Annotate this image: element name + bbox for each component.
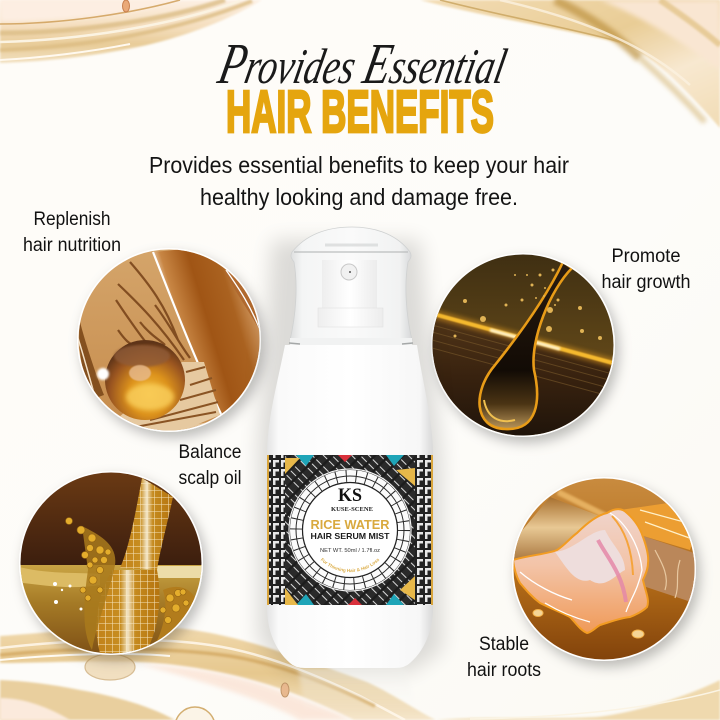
- title: HAIR BENEFITS: HAIR BENEFITS: [226, 79, 494, 145]
- label: Balance scalp oil: [178, 442, 242, 489]
- subtitle: [149, 152, 569, 210]
- wave: top right: [420, 0, 720, 128]
- pump nozzle: [318, 260, 383, 327]
- wave: bottom: [0, 627, 720, 720]
- product label: [267, 455, 433, 605]
- title script: Provides Essential: Provides Essential: [213, 32, 513, 96]
- subtitle: healthy looking and damage free.: [200, 184, 518, 210]
- label: Promote hair growth: [602, 246, 690, 293]
- label text: RICE WATER: [310, 517, 390, 532]
- label text: HAIR SERUM MIST: [310, 531, 390, 541]
- label medallion: [289, 469, 411, 591]
- circle photo: stable hair roots: [510, 475, 700, 665]
- label: Promote hair growth: Promote: [612, 246, 680, 267]
- label: Replenish hair nutrition: [23, 209, 121, 256]
- circle photo: balance scalp oil: [15, 465, 205, 660]
- bottle: [252, 226, 448, 706]
- label: Stable hair roots: hair roots: [467, 660, 541, 681]
- bottle body: [267, 345, 433, 668]
- label text: KUSE-SCENE: [331, 507, 373, 513]
- label text: KS: [338, 485, 362, 506]
- label: Stable hair roots: Stable: [479, 634, 529, 655]
- label text: For Thinning Hair & Hair Loss: [320, 558, 380, 573]
- circle photo: promote hair growth: [430, 250, 620, 440]
- label: Balance scalp oil: Balance: [178, 442, 242, 463]
- circle photo: replenish hair nutrition: [70, 240, 280, 440]
- subtitle: Provides essential benefits to keep your hair: [149, 152, 569, 178]
- label: Replenish hair nutrition: Replenish: [34, 209, 110, 230]
- bottle reflection: [298, 668, 418, 712]
- bottle shadow: [258, 240, 442, 672]
- label text: [310, 485, 390, 573]
- label: Balance scalp oil: scalp oil: [178, 468, 242, 489]
- clear cap: [289, 227, 413, 345]
- label text: NET WT. 50ml / 1.7fl.oz: [320, 548, 380, 554]
- wave: top left: [0, 0, 262, 63]
- label: Promote hair growth: hair growth: [602, 272, 690, 293]
- label: Stable hair roots: [467, 634, 541, 681]
- label: Replenish hair nutrition: hair nutrition: [23, 235, 121, 256]
